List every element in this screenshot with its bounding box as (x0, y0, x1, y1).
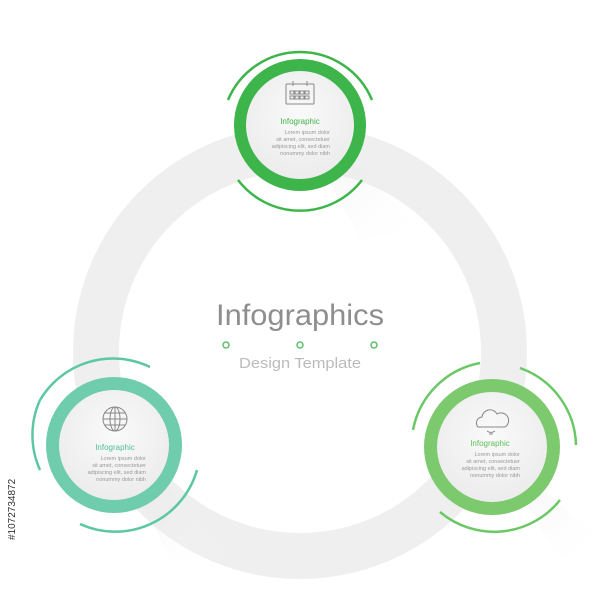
node: left (32, 359, 235, 560)
icon: cloud (476, 410, 509, 434)
node: left: Infographic (95, 443, 135, 452)
dots (223, 342, 377, 348)
node: right: sit amet, consectetuer (466, 459, 520, 465)
node: left: sit amet, consectetuer (92, 463, 146, 469)
center title: Infographics (216, 299, 384, 332)
node: top (228, 52, 420, 240)
node: right: Lorem ipsum dolor (474, 452, 520, 458)
node: top: adipiscing elit, sed diam (272, 144, 330, 150)
node: right: Infographic (470, 439, 510, 448)
node: right (413, 363, 600, 560)
icon: calendar (286, 81, 314, 104)
node: left: Lorem ipsum dolor (100, 456, 146, 462)
side text: #1072734872 (7, 478, 18, 540)
big ring (96, 148, 504, 556)
node: top: Infographic (280, 117, 320, 126)
node: top: Lorem ipsum dolor (284, 130, 330, 136)
node: right: nonummy dolor nibh (470, 473, 520, 479)
node: left: nonummy dolor nibh (96, 477, 146, 483)
node: top: sit amet, consectetuer (276, 137, 330, 143)
node: right: adipiscing elit, sed diam (462, 466, 520, 472)
node: top: nonummy dolor nibh (280, 151, 330, 157)
node: left: adipiscing elit, sed diam (88, 470, 146, 476)
icon: globe (103, 407, 127, 431)
subtitle: Design Template (239, 355, 361, 372)
